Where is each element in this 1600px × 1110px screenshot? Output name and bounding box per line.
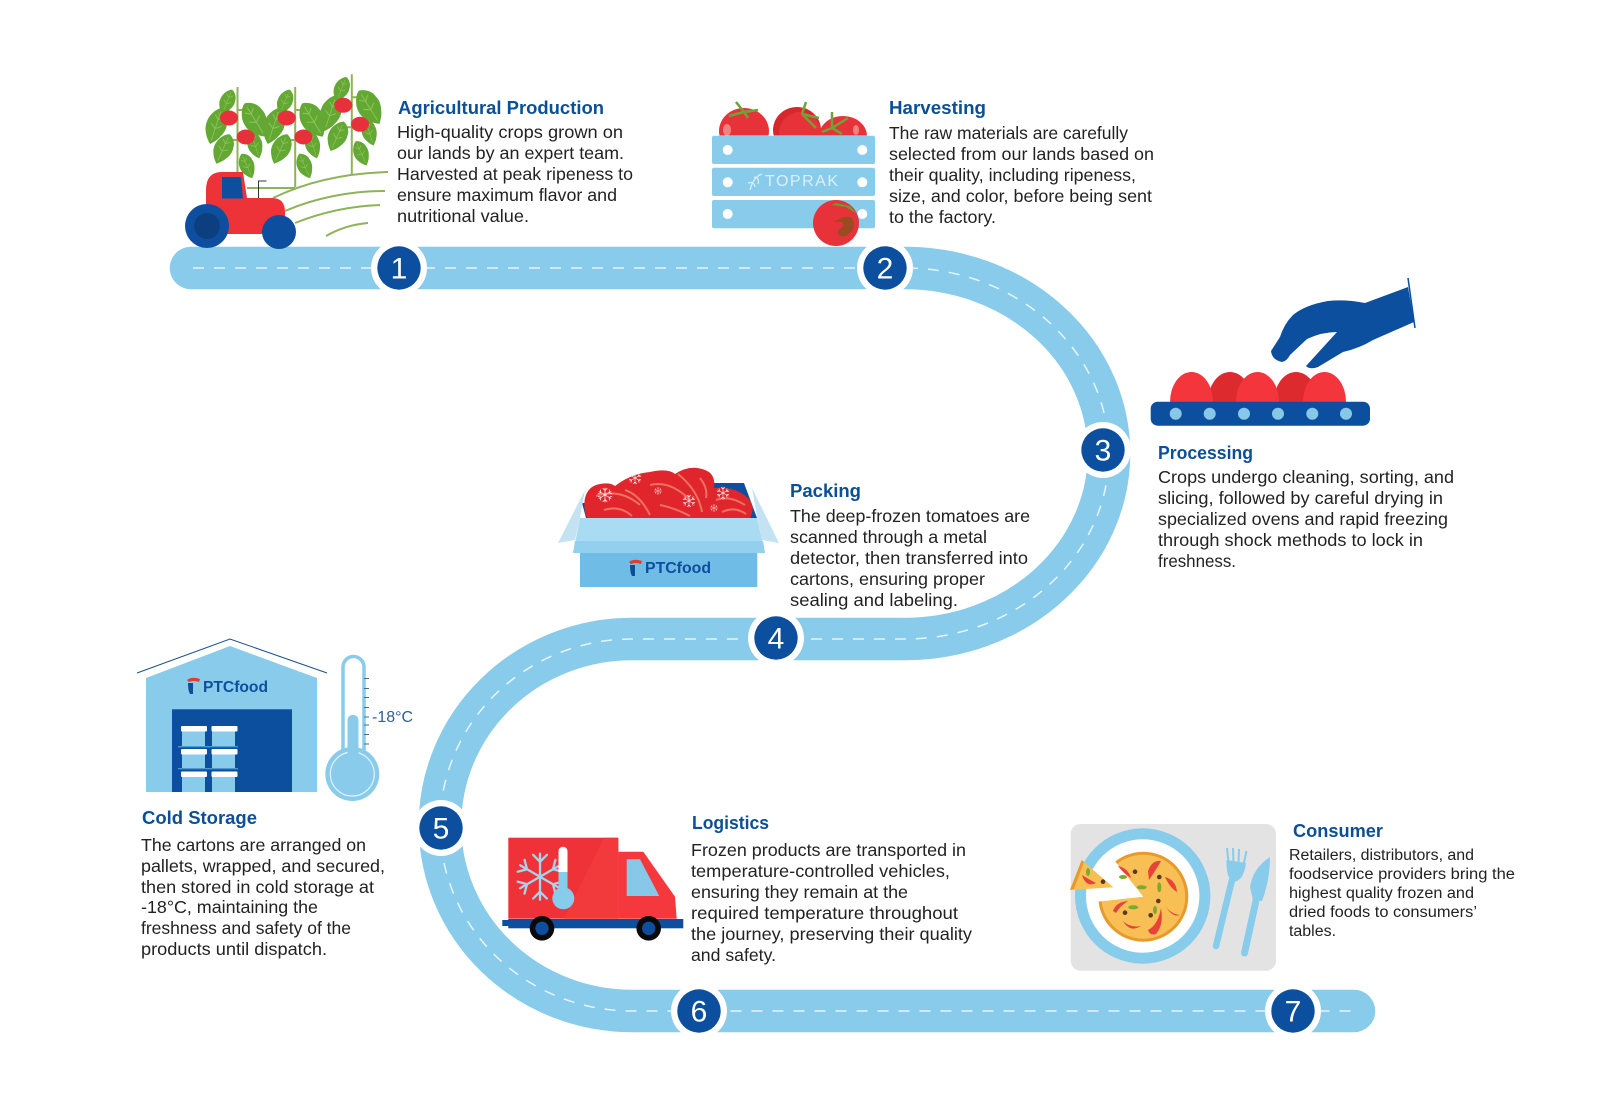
step marker 6: 6	[691, 996, 707, 1028]
step marker 5	[413, 800, 469, 856]
heading and text: Processing: through shock methods to lock in	[1158, 530, 1423, 550]
illustration: hand over conveyor with tomatoes	[1151, 278, 1415, 426]
step marker 5: 5	[433, 812, 449, 846]
heading and text: Logistics: the journey, preserving their quality	[691, 924, 972, 944]
heading and text: Processing: Crops undergo cleaning, sorting, and	[1158, 467, 1454, 487]
illustration: tomato plants and tractor	[185, 74, 390, 249]
heading and text: Cold Storage: products until dispatch.	[141, 939, 327, 959]
illustration: tomato crate	[712, 102, 875, 246]
illustration: pizza plate and cutlery on tray	[1070, 824, 1276, 971]
heading and text: Logistics: Logistics	[692, 812, 769, 833]
heading and text: Harvesting: their quality, including ripeness,	[889, 165, 1136, 185]
heading and text: Harvesting: size, and color, before being sent	[889, 186, 1152, 206]
heading and text: Cold Storage: Cold Storage	[142, 807, 257, 828]
heading and text: Processing: Processing	[1158, 442, 1253, 463]
step marker 1	[371, 240, 427, 296]
heading and text: Logistics	[691, 812, 972, 965]
heading and text: Cold Storage: -18°C, maintaining the	[141, 897, 318, 917]
step marker 2	[857, 240, 913, 296]
heading and text: Agricultural Production	[397, 97, 633, 226]
heading and text: Consumer: tables.	[1289, 923, 1336, 940]
heading and text: Agricultural Production: Harvested at peak ripeness to	[397, 164, 633, 184]
illustration: cold storage warehouse	[137, 639, 327, 792]
heading and text: Harvesting: The raw materials are carefully	[889, 123, 1128, 143]
illustration: cold storage warehouse: PTCfood	[203, 679, 268, 696]
illustration: carton of frozen tomatoes	[558, 468, 779, 587]
heading and text: Agricultural Production: nutritional value.	[397, 206, 529, 226]
heading and text: Harvesting	[889, 97, 1154, 227]
heading and text: Packing	[790, 480, 1030, 610]
step marker 3: 3	[1095, 434, 1111, 468]
heading and text: Consumer: Consumer	[1293, 820, 1383, 841]
heading and text: Packing: scanned through a metal	[790, 527, 987, 547]
heading and text: Processing: slicing, followed by careful drying in	[1158, 488, 1443, 508]
step marker 4	[748, 610, 804, 666]
heading and text: Logistics: and safety.	[691, 945, 776, 965]
heading and text: Cold Storage: freshness and safety of the	[141, 918, 351, 938]
heading and text: Consumer: highest quality frozen and	[1289, 885, 1474, 902]
icon: thermometer at -18°C	[325, 656, 413, 801]
heading and text: Logistics: Frozen products are transported in	[691, 840, 966, 860]
illustration: refrigerated truck	[502, 838, 683, 941]
heading and text: Packing: The deep-frozen tomatoes are	[790, 506, 1030, 526]
heading and text: Harvesting: Harvesting	[889, 97, 986, 118]
heading and text: Logistics: temperature-controlled vehicles,	[691, 861, 950, 881]
step marker 3	[1075, 422, 1131, 478]
heading and text: Packing: sealing and labeling.	[790, 590, 958, 610]
heading and text: Logistics: required temperature throughout	[691, 903, 958, 923]
step marker 1: 1	[391, 252, 407, 286]
heading and text: Consumer: foodservice providers bring the	[1289, 866, 1515, 883]
illustration: carton of frozen tomatoes: PTCfood	[645, 560, 711, 577]
heading and text: Cold Storage	[141, 807, 385, 959]
step marker 4: 4	[768, 622, 784, 656]
heading and text: Agricultural Production: our lands by an expert team.	[397, 143, 624, 163]
heading and text: Cold Storage: pallets, wrapped, and secured,	[141, 856, 385, 876]
step marker 6	[671, 983, 727, 1039]
heading and text: Packing: Packing	[790, 480, 861, 501]
heading and text: Cold Storage: then stored in cold storage at	[141, 877, 374, 897]
heading and text: Cold Storage: The cartons are arranged on	[141, 835, 366, 855]
step marker 7: 7	[1285, 996, 1301, 1028]
heading and text: Harvesting: selected from our lands based on	[889, 144, 1154, 164]
heading and text: Agricultural Production: High-quality crops grown on	[397, 122, 623, 142]
heading and text: Agricultural Production: Agricultural Production	[398, 97, 604, 118]
heading and text: Consumer	[1289, 820, 1515, 940]
heading and text: Logistics: ensuring they remain at the	[691, 882, 908, 902]
heading and text: Packing: cartons, ensuring proper	[790, 569, 985, 589]
illustration: tomato crate: TOPRAK	[765, 173, 838, 190]
heading and text: Processing	[1158, 442, 1454, 571]
heading and text: Consumer: Retailers, distributors, and	[1289, 847, 1474, 864]
heading and text: Consumer: dried foods to consumers’	[1289, 904, 1477, 921]
heading and text: Agricultural Production: ensure maximum flavor and	[397, 185, 617, 205]
step marker 7	[1265, 983, 1321, 1039]
heading and text: Processing: specialized ovens and rapid freezing	[1158, 509, 1448, 529]
step marker 2: 2	[877, 252, 893, 286]
heading and text: Packing: detector, then transferred into	[790, 548, 1028, 568]
winding road	[191, 268, 1358, 1011]
icon: thermometer at -18°C: -18°C	[372, 709, 413, 726]
heading and text: Processing: freshness.	[1158, 551, 1236, 571]
heading and text: Harvesting: to the factory.	[889, 207, 996, 227]
